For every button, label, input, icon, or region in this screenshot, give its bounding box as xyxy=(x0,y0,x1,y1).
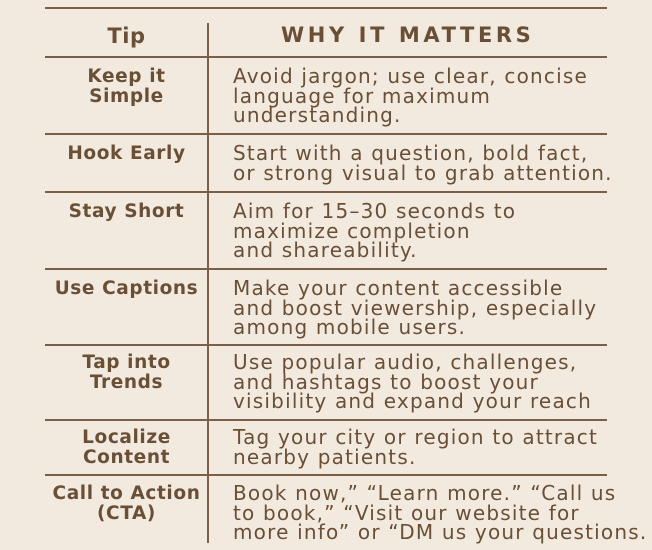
header: why it matters: WHY IT MATTERS xyxy=(281,23,534,47)
description: maximize completion xyxy=(233,218,471,242)
description xyxy=(233,350,592,413)
row: call to action xyxy=(53,481,647,544)
description xyxy=(233,481,647,544)
header: Tip: Tip xyxy=(107,24,146,48)
description: Use popular audio, challenges, xyxy=(233,350,577,374)
description: Tag your city or region to attract xyxy=(233,425,598,449)
row: stay short xyxy=(69,199,516,262)
tip: (CTA) xyxy=(97,503,156,524)
description xyxy=(233,199,516,262)
description: and boost viewership, especially xyxy=(233,296,597,320)
tip: Call to Action xyxy=(53,483,200,504)
tip xyxy=(82,427,171,468)
tip: Localize xyxy=(82,427,171,448)
description: Make your content accessible xyxy=(233,276,563,300)
description: and shareability. xyxy=(233,238,418,262)
description: Avoid jargon; use clear, concise xyxy=(233,64,588,88)
description: and hashtags to boost your xyxy=(233,370,539,394)
tip: Use Captions xyxy=(55,278,198,299)
tip xyxy=(82,352,171,393)
row: localize content xyxy=(82,425,598,468)
description: language for maximum xyxy=(233,84,491,108)
description: Aim for 15–30 seconds to xyxy=(233,199,516,223)
tip: Tap into xyxy=(82,352,171,373)
row: keep it simple xyxy=(87,64,588,127)
tip: Keep it xyxy=(87,66,166,87)
tip xyxy=(53,483,200,524)
tip: Stay Short xyxy=(69,201,184,222)
description xyxy=(233,276,597,339)
description: Start with a question, bold fact, xyxy=(233,141,588,165)
description xyxy=(233,141,613,184)
description: understanding. xyxy=(233,103,402,127)
description: or strong visual to grab attention. xyxy=(233,160,613,184)
description: Book now,” “Learn more.” “Call us xyxy=(233,481,616,505)
description xyxy=(233,64,588,127)
description: nearby patients. xyxy=(233,444,416,468)
description: visibility and expand your reach xyxy=(233,389,592,413)
tip: Simple xyxy=(89,86,164,107)
tip: Content xyxy=(83,447,170,468)
row: hook early xyxy=(67,141,613,184)
description xyxy=(232,425,598,468)
tip: Hook Early xyxy=(67,143,186,164)
tip: Trends xyxy=(90,372,163,393)
row: tap into trends xyxy=(82,350,592,413)
description: more info” or “DM us your questions. xyxy=(233,520,647,544)
description: to book,” “Visit our website for xyxy=(233,500,580,524)
description: among mobile users. xyxy=(233,315,466,339)
tip xyxy=(87,66,166,107)
row: use captions xyxy=(55,276,597,339)
